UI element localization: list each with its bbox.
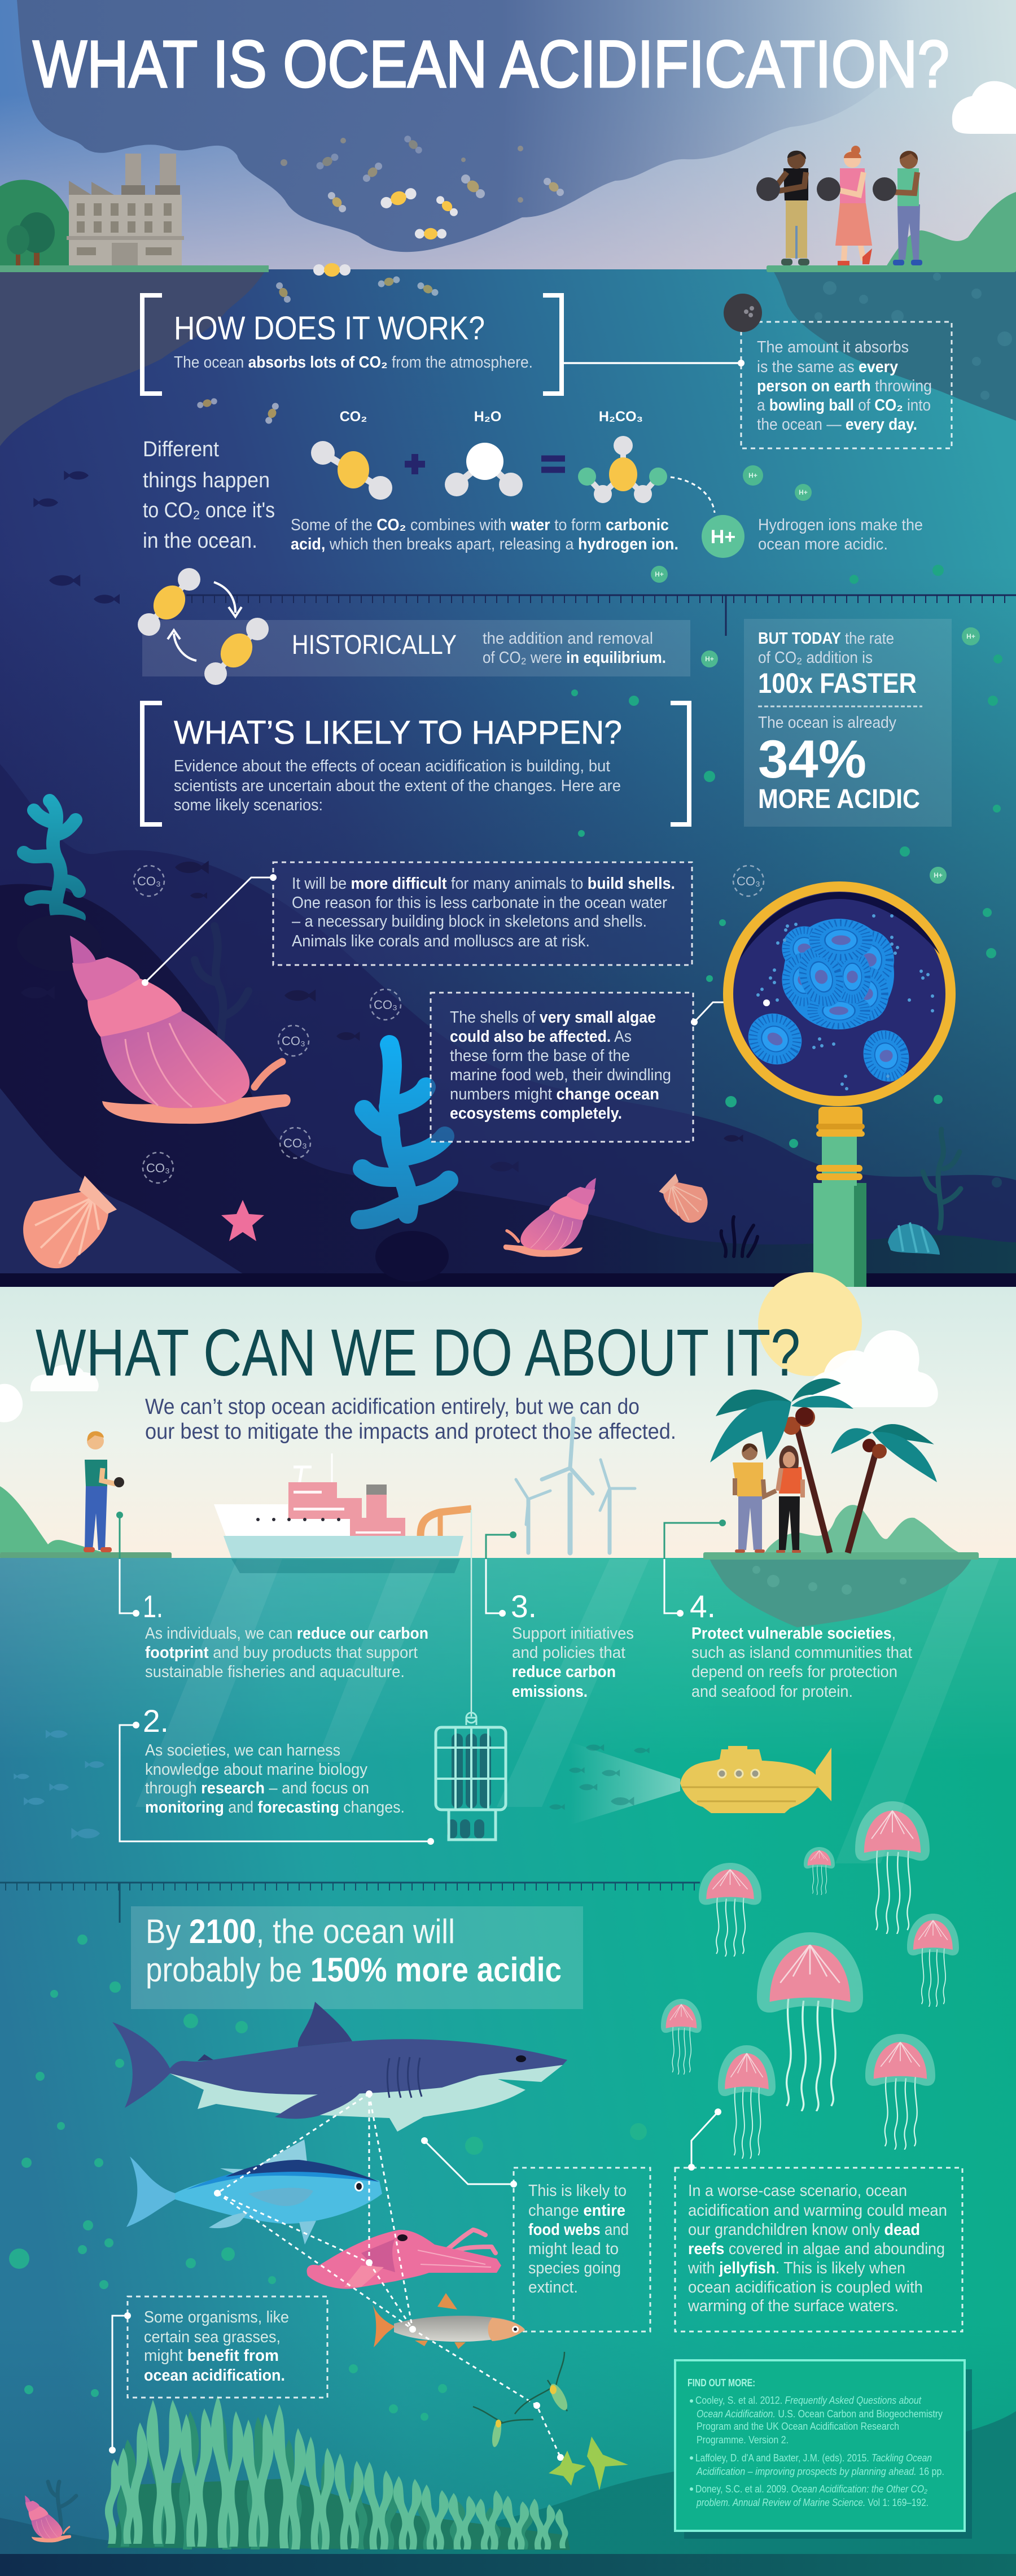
pointer dot <box>763 999 770 1006</box>
text <box>292 875 675 950</box>
ruler 2 <box>0 1883 700 1923</box>
stat: 34%: 34% <box>758 730 866 789</box>
front blades <box>105 2395 568 2549</box>
small snail <box>503 1178 596 1257</box>
cliff stipple <box>814 273 1012 400</box>
molecule: H2CO3 <box>578 436 667 503</box>
body: scientists are uncertain about the extent of the changes. Here are <box>174 777 621 795</box>
scallop shell, small <box>659 1173 708 1222</box>
text: hydrogen ions <box>758 516 923 553</box>
panel: by 2100 <box>131 1906 583 2009</box>
coral: dark small <box>48 2482 76 2535</box>
text: warming of the surface waters. <box>687 2297 899 2315</box>
equals <box>541 459 565 470</box>
text: reefs covered in algae and abounding <box>688 2240 945 2258</box>
wind turbines <box>516 1418 635 1553</box>
text: ocean acidification is coupled with <box>688 2278 923 2296</box>
small H+ ions <box>651 465 980 884</box>
stat text: probably be 150% more acidic <box>146 1951 562 1989</box>
body <box>174 757 621 814</box>
subheading: The ocean absorbs lots of CO₂ from the atmosphere. <box>174 353 533 372</box>
text: different things happen: to CO₂ once it's <box>143 499 275 522</box>
person 3 <box>891 151 922 265</box>
text: with jellyfish. This is likely when <box>687 2259 905 2277</box>
text: through research – and focus on <box>145 1779 369 1797</box>
text: The shells of very small algae <box>450 1008 656 1027</box>
CO3 ions: CO₃ <box>737 874 760 888</box>
large hydrogen ion <box>702 515 745 558</box>
text: different things happen: Different <box>143 438 219 461</box>
shark <box>112 2002 567 2132</box>
text: but today <box>758 630 894 667</box>
right hills <box>886 192 1016 267</box>
bracket left <box>142 295 162 394</box>
bracket right <box>543 295 562 394</box>
callout: worse-case <box>675 2108 962 2332</box>
label: H2O: H₂O <box>474 409 501 425</box>
stat: 100x faster: 100x FASTER <box>758 667 917 699</box>
reference 3 <box>690 2483 929 2508</box>
ship <box>214 1453 471 1558</box>
text: and policies that <box>512 1644 625 1662</box>
right cliff <box>773 271 1016 421</box>
text: certain sea grasses, <box>144 2328 281 2346</box>
title 2: WHAT CAN WE DO ABOUT IT? <box>36 1316 800 1390</box>
sea section 2 vertical shading <box>0 1558 1016 2576</box>
CO3 ions: CO₃ <box>137 874 161 888</box>
text: but today: BUT TODAY the rate <box>758 630 894 648</box>
connector to bowling ball callout <box>564 362 741 364</box>
factory <box>67 154 184 266</box>
callout text: person on earth throwing <box>757 377 932 395</box>
callout text <box>757 338 932 434</box>
reference 2 <box>690 2452 944 2477</box>
large hydrogen ion: H+ <box>711 526 735 548</box>
couple <box>733 1443 805 1553</box>
fish school, left <box>14 1730 104 1839</box>
number: 1. <box>143 1588 163 1624</box>
connector <box>145 877 272 983</box>
seabed mid layer <box>0 764 1016 1287</box>
callout text: The amount it absorbs <box>757 338 909 356</box>
text: and seafood for protein. <box>691 1683 853 1701</box>
green particles, section 1 <box>571 565 1002 1187</box>
reference 3: problem. Annual Review of Marine Science. Vol 1: 169–192. <box>696 2497 929 2508</box>
stat: more acidic: MORE ACIDIC <box>758 784 920 814</box>
food web dashed lines <box>214 2090 564 2461</box>
left island <box>0 1486 172 1679</box>
text: of CO₂ were in equilibrium. <box>483 649 666 667</box>
light shafts <box>135 1559 999 1863</box>
callout: sea grasses <box>109 2296 327 2453</box>
text: might benefit from <box>144 2347 279 2365</box>
text <box>145 1625 428 1681</box>
dark rock under coral <box>375 1231 449 1282</box>
text: different things happen <box>143 438 275 553</box>
person 1 <box>776 151 809 265</box>
text: This is likely to <box>528 2182 627 2200</box>
text <box>483 630 666 667</box>
seabed section 2 <box>0 2411 1016 2558</box>
text: but today: of CO₂ addition is <box>758 649 873 667</box>
stat text <box>146 1913 562 1989</box>
connector <box>664 1520 726 1617</box>
heading: HOW DOES IT WORK? <box>174 310 485 347</box>
callout: food webs <box>421 2137 650 2332</box>
text: reduce carbon <box>512 1663 616 1681</box>
person 2 <box>834 146 872 265</box>
callout: shells <box>142 862 692 986</box>
body: some likely scenarios: <box>174 796 323 814</box>
reference 3: Doney, S.C. et al. 2009. Ocean Acidification: the Other CO₂ <box>695 2483 927 2495</box>
text <box>528 2182 629 2296</box>
step 3 <box>486 1531 634 1701</box>
squid <box>307 2230 501 2289</box>
big snail <box>70 936 291 1124</box>
text: emissions. <box>512 1683 588 1701</box>
panel: find out more <box>675 2360 972 2539</box>
sea section 2 <box>0 1558 1016 2576</box>
intro text: our best to mitigate the impacts and protect those affected. <box>145 1420 676 1444</box>
bottom strip <box>0 2554 1016 2576</box>
label: H2CO3: H₂CO₃ <box>599 409 643 425</box>
reference 1 <box>690 2395 943 2446</box>
molecule: CO2 <box>311 441 392 500</box>
left cliff <box>0 271 265 446</box>
sea grass silhouette <box>721 1217 757 1256</box>
seabed dark layer <box>0 884 1016 1287</box>
bracket left <box>142 703 162 824</box>
lens <box>728 887 951 1101</box>
person with ball <box>84 1431 124 1552</box>
CO3 ions <box>134 866 764 1183</box>
right island <box>703 1505 979 1627</box>
small H+ ions: H+ <box>966 632 975 640</box>
cloud: right <box>952 81 1016 134</box>
dark rock under coral <box>17 915 102 971</box>
text: Support initiatives <box>512 1625 634 1643</box>
text <box>512 1625 634 1701</box>
callout: algae <box>431 993 767 1142</box>
number: 2. <box>143 1703 169 1739</box>
text: Animals like corals and molluscs are at risk. <box>292 932 590 950</box>
text: It will be more difficult for many animals to build shells. <box>292 875 675 893</box>
CO3 ions: CO₃ <box>283 1136 307 1150</box>
text: some of the CO2: acid, which then breaks apart, releasing a hydrogen ion. <box>291 535 678 553</box>
step 4 <box>664 1520 912 1701</box>
text: ecosystems completely. <box>450 1104 622 1123</box>
text: already: The ocean is already <box>758 714 896 732</box>
man <box>733 1443 776 1553</box>
reference 1: Programme. Version 2. <box>697 2434 789 2446</box>
fish in light beam <box>549 1744 650 1810</box>
text: ocean acidification. <box>144 2367 285 2385</box>
starfish <box>221 1200 264 1241</box>
CO2 molecules rising <box>196 134 566 425</box>
connector <box>424 2141 514 2184</box>
text: extinct. <box>528 2278 578 2296</box>
text <box>691 1625 912 1701</box>
reference 1: Ocean Acidification. U.S. Ocean Carbon and Biogeochemistry <box>697 2408 943 2420</box>
stat text: By 2100, the ocean will <box>146 1913 455 1950</box>
text: some of the CO2 <box>291 516 678 553</box>
text: hydrogen ions: Hydrogen ions make the <box>758 516 923 534</box>
icon: bowling ball <box>724 294 762 332</box>
lens shadow <box>739 892 940 960</box>
monitoring cage <box>436 1510 506 1840</box>
text: different things happen: in the ocean. <box>143 529 257 553</box>
body: Evidence about the effects of ocean acidification is building, but <box>174 757 610 775</box>
text: Some organisms, like <box>144 2308 289 2326</box>
panel: historically <box>142 620 690 676</box>
chemical equation <box>311 409 715 513</box>
reference 2: Acidification – improving prospects by planning ahead. 16 pp. <box>696 2466 944 2477</box>
scallop shell, left <box>23 1176 117 1268</box>
seabed lower left patch <box>0 1088 265 1287</box>
text: such as island communities that <box>691 1644 912 1662</box>
step 1 <box>116 1512 428 1681</box>
equilibrium cycle icon <box>138 568 269 685</box>
small H+ ions: H+ <box>705 655 714 663</box>
coral: dark center-left <box>195 926 248 1067</box>
CO3 ions: CO₃ <box>146 1161 170 1175</box>
small H+ ions: H+ <box>934 871 943 879</box>
coral: dark right <box>923 1129 961 1228</box>
sea grass <box>105 2395 570 2550</box>
text: monitoring and forecasting changes. <box>145 1798 405 1817</box>
text <box>144 2308 289 2385</box>
green particles, section 2 <box>9 1935 647 2421</box>
intro text <box>145 1395 676 1444</box>
small H+ ions: H+ <box>748 471 757 479</box>
jellyfish group <box>661 1801 959 2159</box>
sea section 1 darkening <box>0 565 1016 1287</box>
seabed bottom strip <box>0 1273 1016 1287</box>
text: our grandchildren know only dead <box>688 2221 920 2239</box>
reference 1: Cooley, S. et al. 2012. Frequently Asked Questions about <box>695 2395 922 2406</box>
small pink snail <box>25 2495 71 2543</box>
plankton specks <box>756 914 934 1090</box>
text: depend on reefs for protection <box>691 1663 897 1681</box>
text <box>450 1008 671 1123</box>
callout text: the ocean — every day. <box>757 416 917 434</box>
molecule: H2O <box>445 443 523 496</box>
left hills and trees <box>0 180 70 267</box>
sky section 2 <box>0 1287 1016 1559</box>
magnifying glass <box>728 887 951 1287</box>
connector <box>486 1531 516 1617</box>
text: footprint and buy products that support <box>145 1644 418 1662</box>
text: Protect vulnerable societies, <box>691 1625 896 1643</box>
reference 2: Laffoley, D. d'A and Baxter, J.M. (eds). 2015. Tackling Ocean <box>695 2452 932 2464</box>
bowling balls <box>756 177 896 201</box>
heading: FIND OUT MORE: <box>687 2377 755 2389</box>
text: change entire <box>528 2202 625 2220</box>
clouds section 2 <box>0 1330 938 1422</box>
panel: what's likely to happen <box>142 703 689 824</box>
coral: bright blue <box>360 1045 449 1220</box>
panel: how does it work <box>142 295 562 394</box>
people holding bowling balls <box>756 146 922 265</box>
dashed arrow <box>671 477 715 513</box>
number: 3. <box>511 1588 537 1624</box>
sun <box>758 1272 862 1376</box>
connector <box>691 2112 718 2167</box>
tuna <box>126 2140 382 2245</box>
mussel <box>888 1222 940 1255</box>
smoke cloud <box>17 0 988 252</box>
bracket right <box>671 703 689 824</box>
text: – a necessary building block in skeletons and shells. <box>292 912 647 931</box>
text: food webs and <box>528 2221 629 2239</box>
back blades <box>117 2411 533 2549</box>
small H+ ions: H+ <box>799 488 808 496</box>
text: might lead to <box>528 2240 619 2258</box>
ship shadow <box>231 1559 460 1573</box>
connector <box>112 2316 128 2450</box>
sky lower glow <box>0 0 1016 271</box>
left cliff ground <box>0 265 269 272</box>
heading: HISTORICALLY <box>292 630 457 660</box>
text: As societies, we can harness <box>145 1741 340 1759</box>
woman <box>776 1446 805 1553</box>
text: knowledge about marine biology <box>145 1761 367 1779</box>
intro text: We can’t stop ocean acidification entirely, but we can do <box>145 1395 640 1419</box>
text: As individuals, we can reduce our carbon <box>145 1625 428 1643</box>
plus <box>405 454 425 474</box>
text: the addition and removal <box>483 630 653 648</box>
sea section 1 <box>0 269 1016 1287</box>
text: different things happen: things happen <box>143 469 270 492</box>
sky background <box>0 0 1016 271</box>
text: marine food web, their dwindling <box>450 1066 671 1084</box>
text: could also be affected. As <box>450 1028 632 1046</box>
text: numbers might change ocean <box>450 1085 659 1103</box>
text: species going <box>528 2259 621 2277</box>
reference 1: Program and the UK Ocean Acidification Research <box>697 2421 899 2432</box>
coccolithophore <box>739 919 916 1088</box>
connector <box>120 1722 434 1845</box>
label: CO2: CO₂ <box>340 409 367 425</box>
text: sustainable fisheries and aquaculture. <box>145 1663 405 1681</box>
submarine <box>680 1746 831 1813</box>
right cliff ground <box>767 265 1016 272</box>
callout: bowling ball <box>724 294 952 448</box>
text: One reason for this is less carbonate in the ocean water <box>292 894 667 912</box>
connector <box>694 1002 767 1022</box>
plankton: star diatoms <box>549 2437 628 2490</box>
text <box>687 2182 947 2315</box>
small fish <box>373 2293 525 2349</box>
palm trees <box>710 1378 937 1553</box>
small H+ ions: H+ <box>655 570 664 578</box>
grass base shadow <box>107 2479 570 2550</box>
handle <box>813 1107 866 1287</box>
text: some of the CO2: Some of the CO₂ combines with water to form carbonic <box>291 516 669 534</box>
CO3 ions: CO₃ <box>374 998 397 1012</box>
panel: today <box>744 619 952 827</box>
text: these form the base of the <box>450 1047 630 1065</box>
heading: WHAT’S LIKELY TO HAPPEN? <box>174 714 622 751</box>
text <box>145 1741 405 1817</box>
connector <box>116 1512 139 1617</box>
CO3 ions: CO₃ <box>282 1034 305 1048</box>
text: In a worse-case scenario, ocean <box>688 2182 907 2200</box>
step 2 <box>120 1703 434 1845</box>
fish: dark silhouettes <box>21 861 743 1172</box>
number: 4. <box>690 1588 716 1624</box>
submarine light cone <box>570 1742 680 1825</box>
callout text: a bowling ball of CO₂ into <box>757 396 931 414</box>
fish school, upper <box>33 470 120 604</box>
text: hydrogen ions: ocean more acidic. <box>758 535 888 553</box>
callout text: is the same as every <box>757 358 898 376</box>
text: acidification and warming could mean <box>688 2202 947 2220</box>
coral: teal left <box>24 801 79 918</box>
plankton: copepods <box>473 2352 571 2448</box>
ruler: depth scale <box>186 595 1016 636</box>
